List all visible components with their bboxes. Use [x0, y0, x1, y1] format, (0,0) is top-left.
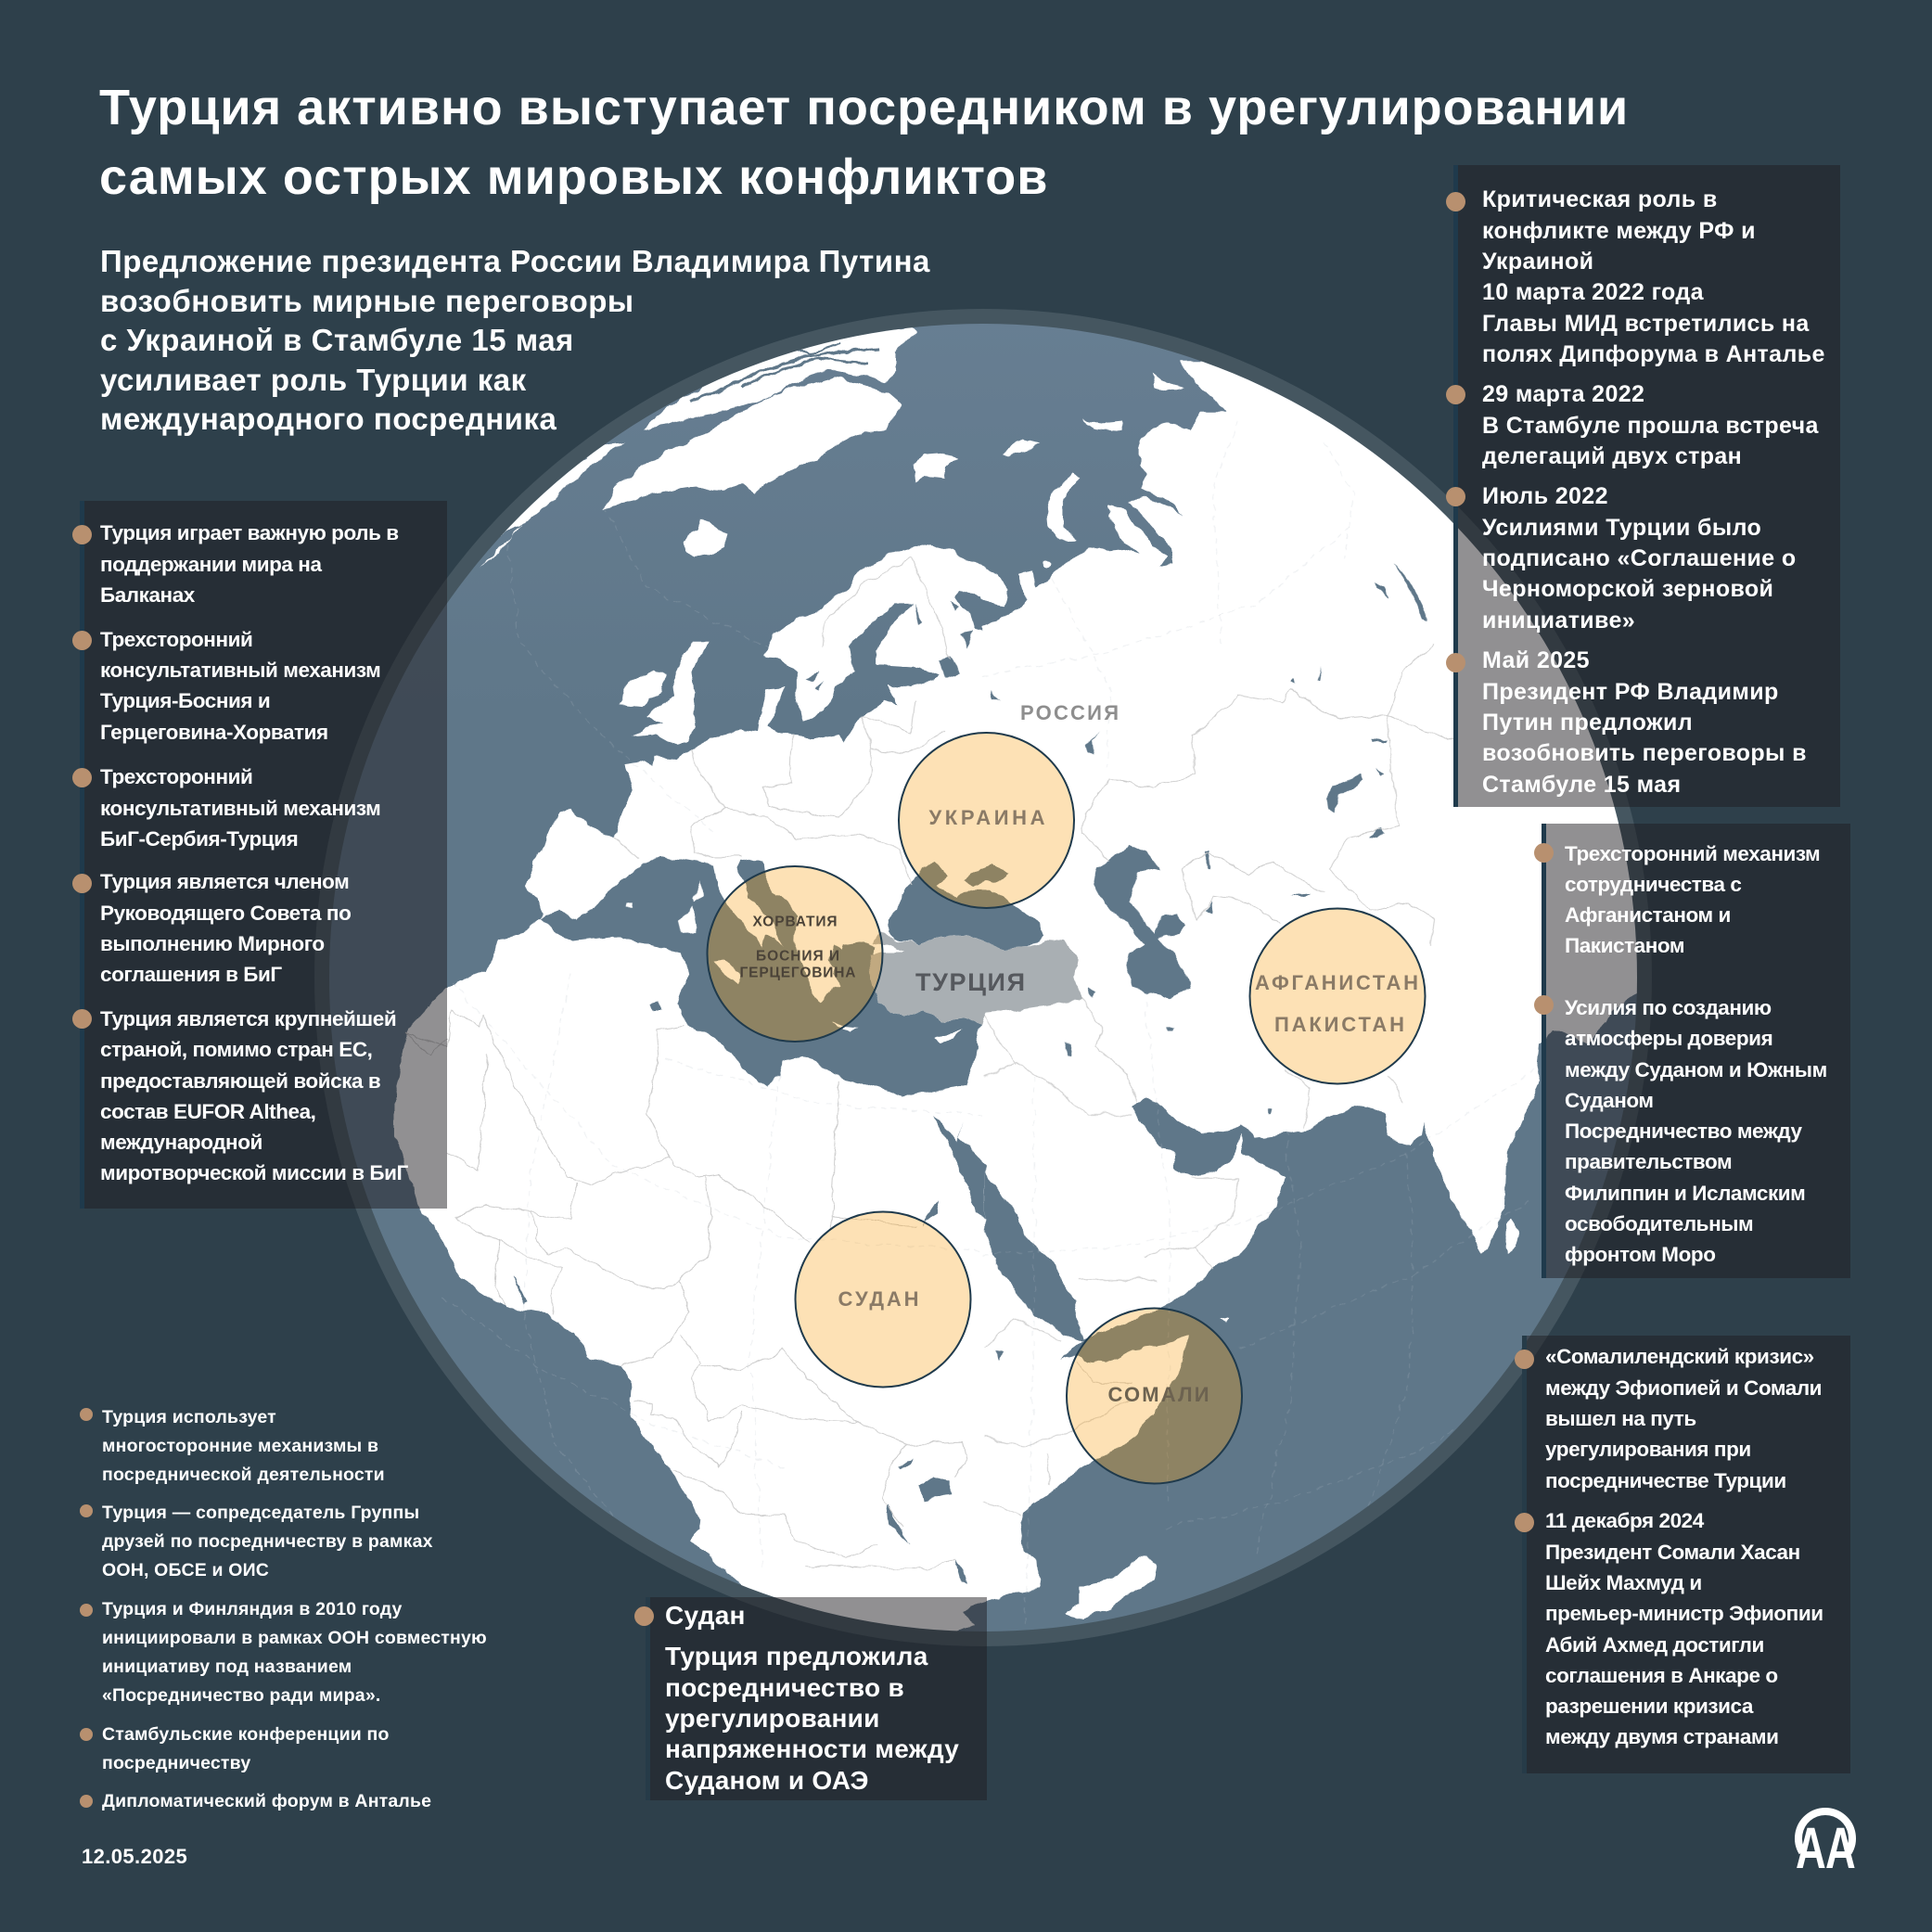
panel: Balkans: соглашения в БиГ	[100, 963, 282, 986]
panel: Afghanistan, Pakistan, Sudan, Philippines: фронтом Моро	[1565, 1243, 1716, 1266]
panel: Balkans: консультативный механизм	[100, 797, 380, 820]
block: multilateral mechanisms list: Турция — сопредседатель Группы	[102, 1503, 419, 1523]
land: Europe, Greenland and north Atlantic	[481, 327, 985, 976]
circle: Somalia: СОМАЛИ	[1107, 1383, 1209, 1406]
block: multilateral mechanisms list: инициировали в рамках ООН совместную	[102, 1628, 487, 1648]
circle: Sudan: СУДАН	[838, 1287, 918, 1311]
circle: Afghanistan and Pakistan	[1250, 909, 1425, 1083]
panel: Sudan and UAE: урегулировании	[665, 1704, 880, 1733]
block: multilateral mechanisms list: инициативу под названием	[102, 1657, 352, 1677]
block: multilateral mechanisms list: посредничеству	[102, 1753, 250, 1773]
subtitle: с Украиной в Стамбуле 15 мая	[100, 323, 574, 357]
title	[99, 80, 1629, 204]
Turkey	[869, 930, 1082, 1025]
land: Africa west	[394, 972, 985, 1656]
panel: Sudan and UAE	[646, 1597, 987, 1800]
panel: Russia and Ukraine: Май 2025	[1482, 647, 1590, 673]
panel: Balkans: Герцеговина-Хорватия	[100, 721, 328, 744]
lakes and borders: Asia	[983, 421, 1456, 997]
panel: Russia and Ukraine: 10 марта 2022 года	[1482, 279, 1704, 305]
panel: Russia and Ukraine: инициативе»	[1482, 608, 1635, 633]
circle: Croatia and Bosnia: ХОРВАТИЯ	[753, 915, 837, 929]
panel: Balkans: предоставляющей войска в	[100, 1069, 380, 1093]
panel: Balkans: Турция играет важную роль в	[100, 521, 399, 544]
subtitle: Предложение президента России Владимира Путина	[100, 244, 930, 278]
panel: Afghanistan, Pakistan, Sudan, Philippines: сотрудничества с	[1565, 873, 1741, 896]
panel: Sudan and UAE: Суданом и ОАЭ	[665, 1766, 869, 1795]
circle: Afghanistan and Pakistan: ПАКИСТАН	[1274, 1013, 1404, 1036]
land and water layers	[394, 327, 1665, 1656]
panel: Sudan and UAE: напряженности между	[665, 1734, 959, 1763]
panel: Somalia and Ethiopia: премьер-министр Эфиопии	[1545, 1602, 1823, 1625]
circle: Croatia and Bosnia: ГЕРЦЕГОВИНА	[740, 965, 855, 981]
panel: Russia and Ukraine: возобновить переговоры в	[1482, 740, 1807, 766]
circle: Sudan	[796, 1211, 970, 1388]
panel: Somalia and Ethiopia: между двумя странами	[1545, 1725, 1779, 1748]
panel: Russia and Ukraine: Украиной	[1482, 249, 1593, 275]
panel: Balkans: страной, помимо стран ЕС,	[100, 1038, 372, 1061]
panel: Afghanistan, Pakistan, Sudan, Philippines: между Суданом и Южным	[1565, 1058, 1827, 1081]
title: самых острых мировых конфликтов	[99, 148, 1048, 204]
block: multilateral mechanisms list: «Посредничество ради мира».	[102, 1685, 380, 1706]
panel: Russia and Ukraine: делегаций двух стран	[1482, 443, 1742, 469]
panel: Somalia and Ethiopia: вышел на путь	[1545, 1407, 1696, 1430]
panel: Somalia and Ethiopia: соглашения в Анкаре о	[1545, 1664, 1778, 1687]
map label: Russia: РОССИЯ	[1020, 701, 1119, 724]
panel: Balkans: Трехсторонний	[100, 765, 252, 788]
subtitle	[100, 244, 930, 436]
panel: Sudan and UAE: Турция предложила	[665, 1642, 928, 1670]
borders: Middle East and east Africa	[983, 987, 1537, 1626]
block: multilateral mechanisms list: Стамбульские конференции по	[102, 1723, 390, 1744]
panel: Russia and Ukraine: Путин предложил	[1482, 710, 1693, 736]
panel: Russia and Ukraine: Критическая роль в	[1482, 186, 1718, 212]
panel: Sudan and UAE: посредничество в	[665, 1673, 904, 1702]
panel: Balkans: Турция-Босния и	[100, 689, 270, 712]
panel: Somalia and Ethiopia: посредничестве Турции	[1545, 1469, 1786, 1492]
ocean	[315, 315, 1651, 1642]
panel: Russia and Ukraine: полях Дипфорума в Анталье	[1482, 341, 1825, 367]
panel: Afghanistan, Pakistan, Sudan, Philippines: атмосферы доверия	[1565, 1027, 1772, 1050]
panel: Russia and Ukraine: Президент РФ Владимир	[1482, 679, 1779, 705]
panel: Afghanistan, Pakistan, Sudan, Philippines: Суданом	[1565, 1089, 1654, 1112]
panel: Balkans: БиГ-Сербия-Турция	[100, 827, 298, 851]
panel: Balkans: Турция является крупнейшей	[100, 1007, 396, 1030]
panel: Afghanistan, Pakistan, Sudan, Philippines: Посредничество между	[1565, 1120, 1802, 1143]
block: multilateral mechanisms list: многосторонние механизмы в	[102, 1436, 378, 1456]
panel: Balkans: Руководящего Совета по	[100, 902, 351, 925]
block: multilateral mechanisms list: ООН, ОБСЕ и ОИС	[102, 1560, 269, 1580]
panel: Somalia and Ethiopia: «Сомалилендский кризис»	[1545, 1345, 1814, 1368]
panel: Russia and Ukraine: В Стамбуле прошла встреча	[1482, 413, 1819, 439]
panel: Russia and Ukraine: Черноморской зерновой	[1482, 576, 1773, 602]
panel: Somalia and Ethiopia: разрешении кризиса	[1545, 1695, 1753, 1718]
panel: Russia and Ukraine: Июль 2022	[1482, 483, 1608, 509]
map label: Turkey: ТУРЦИЯ	[915, 968, 1025, 996]
circle: Afghanistan and Pakistan: АФГАНИСТАН	[1255, 971, 1418, 994]
date: 12.05.2025	[82, 1845, 187, 1868]
block: multilateral mechanisms list: друзей по посредничеству в рамках	[102, 1531, 433, 1552]
panel: Balkans: Турция является членом	[100, 870, 349, 893]
panel: Balkans: выполнению Мирного	[100, 932, 325, 955]
panel: Russia and Ukraine	[1453, 165, 1840, 807]
panel: Afghanistan, Pakistan, Sudan, Philippines: Афганистаном и	[1565, 903, 1731, 927]
land: Arabia, India, east Africa	[981, 972, 1665, 1619]
panel: Somalia and Ethiopia	[1522, 1336, 1850, 1773]
circle: Ukraine	[899, 733, 1074, 908]
panel: Afghanistan, Pakistan, Sudan, Philippines: Пакистаном	[1565, 934, 1684, 957]
panel: Russia and Ukraine: конфликте между РФ и	[1482, 218, 1756, 244]
panel: Balkans: миротворческой миссии в БиГ	[100, 1161, 408, 1184]
panel: Somalia and Ethiopia: урегулирования при	[1545, 1438, 1751, 1461]
panel: Russia and Ukraine: Усилиями Турции было	[1482, 515, 1761, 541]
title: Турция активно выступает посредником в урегулировании	[99, 80, 1629, 135]
panel: Balkans: поддержании мира на	[100, 553, 322, 576]
circle: Croatia and Bosnia: БОСНИЯ И	[756, 948, 839, 965]
panel: Balkans: международной	[100, 1131, 262, 1154]
panel: Somalia and Ethiopia: Шейх Махмуд и	[1545, 1571, 1702, 1594]
globe surface	[315, 315, 1665, 1656]
circle: Somalia	[1067, 1308, 1242, 1484]
globe map	[314, 309, 1652, 1646]
land: Russia and Asia	[981, 361, 1665, 976]
panel: Afghanistan, Pakistan, Sudan, Philippines	[1542, 824, 1850, 1278]
panel: Balkans: консультативный механизм	[100, 659, 380, 682]
circle: Croatia and Bosnia	[707, 866, 883, 1042]
panel: Somalia and Ethiopia: между Эфиопией и Сомали	[1545, 1376, 1822, 1400]
islands and lakes: Europe	[507, 506, 973, 933]
panel: Afghanistan, Pakistan, Sudan, Philippines: Трехсторонний механизм	[1565, 842, 1820, 864]
panel: Balkans: состав EUFOR Althea,	[100, 1100, 315, 1123]
block: multilateral mechanisms list: Дипломатический форум в Анталье	[102, 1791, 431, 1811]
borders	[690, 751, 741, 855]
panel: Afghanistan, Pakistan, Sudan, Philippines: правительством	[1565, 1150, 1732, 1173]
block: multilateral mechanisms list: Турция и Финляндия в 2010 году	[102, 1599, 403, 1619]
panel: Russia and Ukraine: Стамбуле 15 мая	[1482, 772, 1681, 798]
panel: Afghanistan, Pakistan, Sudan, Philippines: Усилия по созданию	[1565, 996, 1772, 1019]
water: Mediterranean, Black Sea	[541, 855, 1082, 1097]
panel: Sudan and UAE: Судан	[665, 1601, 746, 1630]
block: multilateral mechanisms list	[80, 1407, 487, 1811]
subtitle: усиливает роль Турции как	[100, 362, 527, 397]
panel: Russia and Ukraine: 29 марта 2022	[1482, 381, 1644, 407]
panel: Russia and Ukraine: подписано «Соглашение о	[1482, 545, 1796, 571]
panel: Russia and Ukraine: Главы МИД встретились на	[1482, 311, 1810, 337]
block: multilateral mechanisms list: Турция использует	[102, 1407, 276, 1427]
block: multilateral mechanisms list: посреднической деятельности	[102, 1465, 385, 1485]
panel: Somalia and Ethiopia: 11 декабря 2024	[1545, 1509, 1704, 1532]
subtitle: возобновить мирные переговоры	[100, 284, 634, 317]
panel: Somalia and Ethiopia: Абий Ахмед достигли	[1545, 1633, 1764, 1657]
panel: Balkans	[80, 501, 447, 1209]
lakes, Red Sea and borders: Africa west	[407, 974, 985, 1583]
panel: Balkans: Балканах	[100, 583, 195, 607]
subtitle: международного посредника	[100, 402, 557, 436]
panel: Balkans: Трехсторонний	[100, 628, 252, 651]
globe ring	[314, 309, 1652, 1646]
panel: Afghanistan, Pakistan, Sudan, Philippines: Филиппин и Исламским	[1565, 1182, 1805, 1205]
panel: Somalia and Ethiopia: Президент Сомали Хасан	[1545, 1541, 1800, 1564]
circle: Ukraine: УКРАИНА	[929, 806, 1045, 829]
panel: Afghanistan, Pakistan, Sudan, Philippines: освободительным	[1565, 1212, 1753, 1235]
